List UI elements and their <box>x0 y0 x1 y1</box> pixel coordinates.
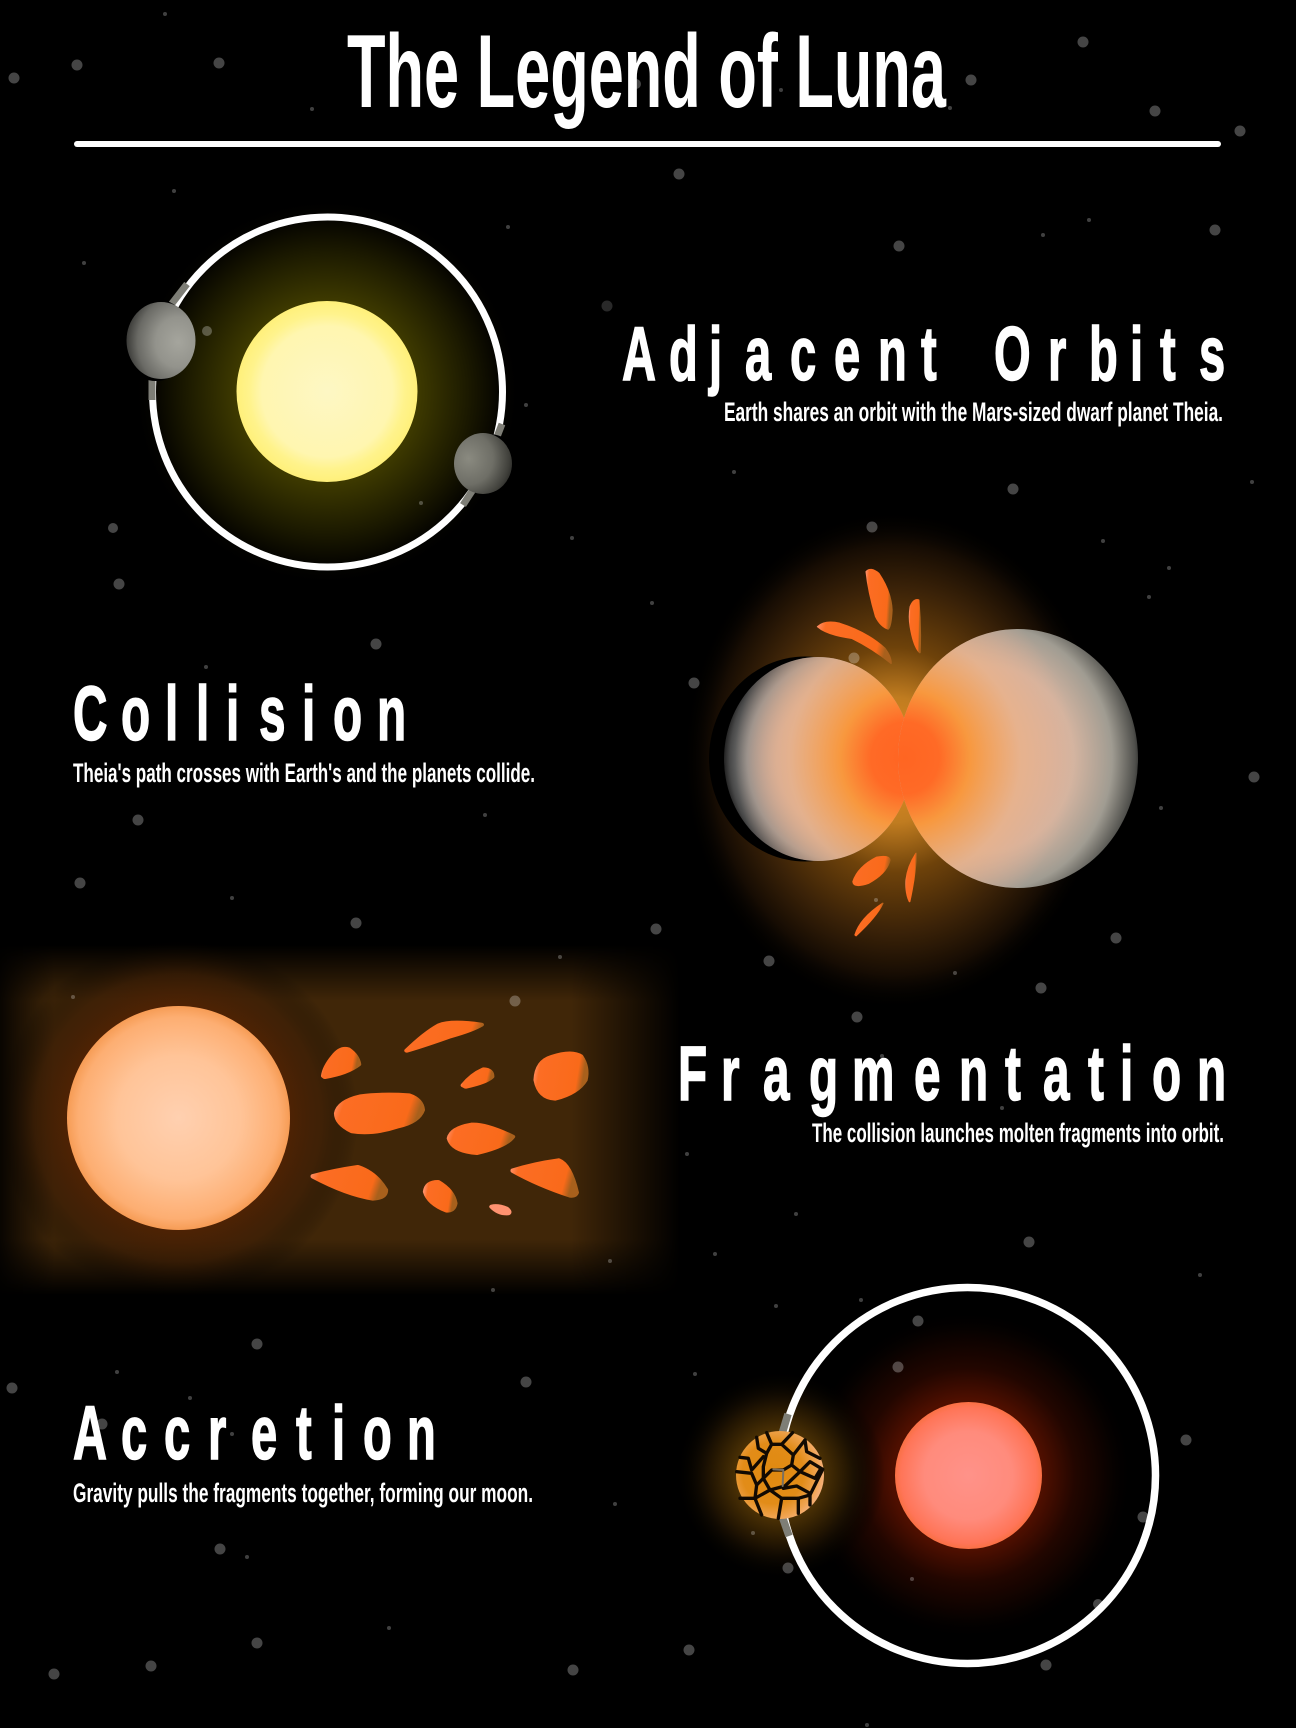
panel: accretion illustration <box>736 1288 1156 1664</box>
planet shadow crescent <box>709 656 901 862</box>
orbit ring <box>780 1288 1156 1664</box>
forming moon <box>736 1431 824 1519</box>
glow: collision <box>682 510 1108 1010</box>
glow: adjacent orbits sun <box>132 197 522 587</box>
panel: fragmentation illustration <box>67 1006 586 1230</box>
dim star <box>602 300 612 312</box>
sun <box>236 301 418 482</box>
heading: adjacent orbits: Adjacent Orbits <box>622 313 1225 397</box>
planet: Theia, colliding <box>724 657 912 861</box>
orbit shadow segments <box>782 1414 789 1536</box>
glow: fragmentation debris <box>0 945 680 1295</box>
panel: adjacent orbits illustration <box>120 217 520 567</box>
cooling star <box>895 1402 1042 1549</box>
planet: Theia <box>120 299 196 381</box>
molten planet <box>67 1006 290 1230</box>
heading: accretion: Accretion <box>73 1392 436 1476</box>
orbit shadow segments <box>152 284 502 505</box>
heading: collision: Collision <box>73 670 406 757</box>
heading: fragmentation: Fragmentation <box>678 1030 1226 1117</box>
moon cracks <box>737 1433 823 1518</box>
molten debris <box>818 570 920 936</box>
orbit ring <box>152 217 502 567</box>
planet: Earth, colliding <box>898 629 1138 888</box>
fragments <box>313 1023 586 1213</box>
caption: accretion: Gravity pulls the fragments together, forming our moon. <box>73 1478 533 1508</box>
glow: accretion moon <box>675 1370 885 1580</box>
glow: accretion star <box>803 1310 1133 1640</box>
glow: fragmentation planet <box>0 938 358 1298</box>
title rule <box>74 141 1221 147</box>
planet: Earth <box>454 433 520 496</box>
panel: collision illustration <box>709 570 1138 936</box>
caption: collision: Theia's path crosses with Earth's and the planets collide. <box>73 758 535 788</box>
